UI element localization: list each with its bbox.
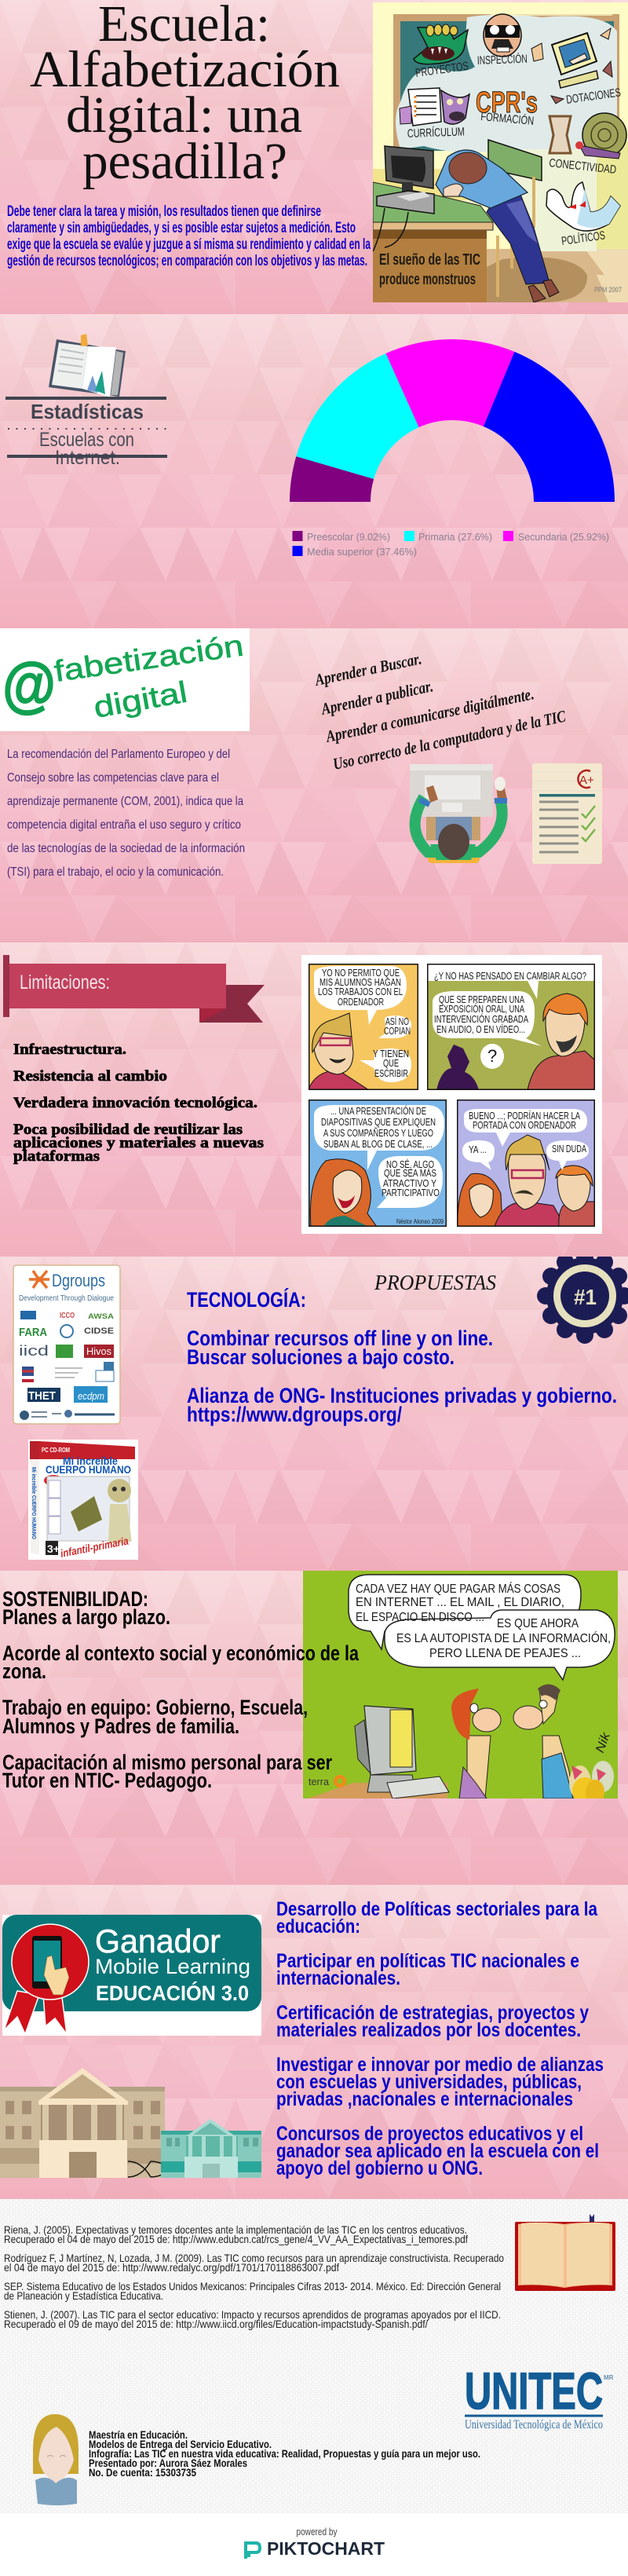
comic strip bbox=[301, 955, 602, 1234]
logo sheet: dgroups: iicd bbox=[19, 1343, 49, 1359]
intro paragraph: gestión de recursos tecnológicos; en comparación con los objetivos y las metas. bbox=[7, 253, 367, 269]
text: aprender a bbox=[312, 649, 568, 774]
text: sostenibilidad: SOSTENIBILIDAD: bbox=[2, 1587, 148, 1611]
panel: estadísticas heading: Escuelas con bbox=[39, 429, 134, 451]
intro paragraph: exige que la escuela se evalúe y juzgue a sí misma su rendimiento y calidad en la bbox=[7, 236, 371, 253]
text: tecnología: https://www.dgroups.org/ bbox=[187, 1403, 402, 1426]
comic panel 3 text: Néstor Alonso 2009 bbox=[396, 1218, 444, 1225]
comic panel 4 text: PORTADA CON ORDENADOR bbox=[473, 1120, 576, 1131]
comic panel 2 text: QUE SE PREPAREN UNA bbox=[439, 994, 524, 1005]
text: references: de Planeación y Estadística Educativa. bbox=[4, 2289, 163, 2302]
comic panel 1 text: ORDENADOR bbox=[338, 997, 384, 1008]
comic panel 3 text bbox=[321, 1105, 444, 1225]
intro paragraph: claramente y sin ambigüedades, y si es posible estar sujetos a medición. Esto bbox=[7, 220, 356, 236]
intro paragraph bbox=[7, 203, 371, 269]
icon: woman avatar bbox=[33, 2414, 78, 2505]
logo sheet: dgroups bbox=[13, 1265, 120, 1424]
text: references: SEP. Sistema Educativo de los Estados Unidos Mexicanos: Principales Cifras 2013- 2014. México. Ed: Dirección General bbox=[4, 2280, 501, 2292]
badge: #1: #1 bbox=[574, 1285, 597, 1309]
text: políticas sectoriales bbox=[276, 1898, 604, 2179]
logo sheet: dgroups: ecdpm bbox=[78, 1390, 104, 1402]
panel: estadísticas heading: Estadísticas bbox=[31, 400, 144, 423]
list: limitaciones: plataformas bbox=[13, 1148, 100, 1165]
caption: El sueño de las TIC bbox=[379, 251, 480, 269]
board labels: INSPECCIÓN bbox=[477, 53, 528, 68]
logo sheet: dgroups: ICCO bbox=[60, 1312, 75, 1320]
chart legend: Media superior (37.46%) bbox=[307, 546, 417, 558]
list: limitaciones: Verdadera innovación tecnológica. bbox=[13, 1095, 257, 1111]
text: sostenibilidad: Capacitación al mismo personal para ser bbox=[2, 1751, 332, 1774]
text: sostenibilidad: Tutor en NTIC- Pedagogo. bbox=[2, 1769, 212, 1792]
chicks and eggs bbox=[569, 1761, 614, 1805]
icon: person at laptop bbox=[410, 764, 507, 863]
footer: powered by piktochart bbox=[246, 2526, 385, 2559]
board labels bbox=[407, 53, 622, 248]
text: competencia digital: competencia digital entraña el uso seguro y crítico bbox=[7, 818, 241, 832]
banner: limitaciones: Limitaciones: bbox=[20, 971, 110, 993]
chair bbox=[488, 140, 542, 181]
title bbox=[30, 0, 340, 190]
list: limitaciones: aplicaciones y materiales a nuevas bbox=[13, 1135, 264, 1151]
text: author credits: Modelos de Entrega del Servicio Educativo. bbox=[89, 2438, 272, 2450]
text: author credits: No. De cuenta: 15303735 bbox=[89, 2466, 196, 2479]
comic panel 2 text: EXPOSICIÓN ORAL, UNA bbox=[439, 1003, 524, 1015]
comic panel 1 bbox=[309, 964, 418, 1090]
monster: CPRs: CPR's bbox=[476, 86, 538, 119]
board labels: POLÍTICOS bbox=[560, 229, 606, 248]
text: sostenibilidad: Alumnos y Padres de familia. bbox=[2, 1714, 239, 1738]
speech bubbles bbox=[349, 1575, 615, 1680]
text: author credits: Maestría en Educación. bbox=[89, 2428, 188, 2441]
logo sheet: dgroups: CIDSE bbox=[84, 1326, 114, 1336]
comic panel 4 text: YA ... bbox=[469, 1144, 487, 1155]
text: author credits: Presentado por: Aurora Sáez Morales bbox=[89, 2457, 247, 2469]
title: digital: una bbox=[66, 86, 302, 144]
logo: alfabetización digital bbox=[0, 628, 250, 731]
board labels: FORMACIÓN bbox=[480, 110, 535, 128]
text: tecnología: Buscar soluciones a bajo costo. bbox=[187, 1345, 455, 1369]
banner: limitaciones bbox=[3, 955, 265, 1023]
text: competencia digital: de las tecnologías de la sociedad de la información bbox=[7, 842, 245, 855]
chart legend: Secundaria (25.92%) bbox=[518, 531, 609, 543]
ghost bbox=[546, 182, 620, 231]
bubble text: CADA VEZ HAY QUE PAGAR MÁS COSAS bbox=[356, 1581, 560, 1596]
award: ganador mobile learning: EDUCACIÓN 3.0 bbox=[96, 1981, 249, 2005]
product box: mi increíble cuerpo humano: CUERPO HUMANO bbox=[46, 1463, 131, 1476]
comic panel 1 text: Y TIENEN bbox=[373, 1048, 409, 1059]
cartoon: el sueño de las TIC produce monstruos bbox=[373, 0, 628, 302]
logo sheet: dgroups: THET bbox=[28, 1389, 56, 1403]
logo sheet: dgroups: Dgroups bbox=[52, 1271, 105, 1290]
text: references bbox=[4, 2223, 504, 2330]
product box: mi increíble cuerpo humano: Mi increíble bbox=[63, 1454, 118, 1467]
comic panel 1 text: ASÍ NO bbox=[385, 1015, 409, 1027]
comic panel 1 text: ESCRIBIR bbox=[374, 1068, 408, 1079]
text: aprender a: Aprender a Buscar. bbox=[312, 649, 423, 690]
chart legend: Preescolar (9.02%) bbox=[307, 531, 390, 543]
chart: semi donut escuelas con internet bbox=[290, 339, 615, 502]
text: sostenibilidad bbox=[2, 1587, 360, 1792]
text: políticas sectoriales: apoyo del gobierno u ONG. bbox=[276, 2157, 483, 2179]
monster: currículum bbox=[400, 88, 469, 126]
title: Alfabetización bbox=[30, 41, 340, 98]
caption: PPM 2007 bbox=[594, 286, 622, 294]
text: tecnología: TECNOLOGÍA: bbox=[187, 1287, 306, 1312]
person left bbox=[451, 1689, 501, 1798]
comic panel 4 bbox=[457, 1100, 595, 1227]
text: competencia digital bbox=[7, 748, 245, 879]
signature and logo: Nik bbox=[593, 1730, 613, 1755]
comic panel 3 text: A SUS COMPAÑEROS Y LUEGO bbox=[323, 1128, 433, 1139]
text: references: el 04 de mayo del 2015 de: http://www.redalyc.org/pdf/1701/170118863007.pdf bbox=[4, 2261, 339, 2274]
list: limitaciones: Infraestructura. bbox=[13, 1041, 126, 1058]
list: limitaciones: Resistencia al cambio bbox=[13, 1068, 167, 1085]
footer: powered by piktochart: powered by bbox=[297, 2526, 338, 2538]
monster: inspección bbox=[484, 14, 521, 57]
text: aprender a: Aprender a publicar. bbox=[318, 676, 435, 719]
list: limitaciones bbox=[13, 1041, 264, 1165]
text: competencia digital: La recomendación del Parlamento Europeo y del bbox=[7, 748, 230, 761]
comic panel 1 text: COPIAN bbox=[384, 1026, 411, 1037]
signature and logo bbox=[309, 1730, 613, 1787]
award: ganador mobile learning bbox=[2, 1915, 261, 2036]
text: sostenibilidad: zona. bbox=[2, 1659, 46, 1683]
text: políticas sectoriales: internacionales. bbox=[276, 1967, 400, 1989]
comic panel 1 text: QUE bbox=[383, 1058, 399, 1069]
footer: powered by piktochart: PIKTOCHART bbox=[267, 2538, 385, 2559]
logo sheet: dgroups: Development Through Dialogue bbox=[19, 1294, 114, 1303]
icon: university buildings bbox=[0, 2068, 261, 2178]
logo sheet: dgroups: Hivos bbox=[86, 1345, 111, 1357]
comic panel 3 text: SUBAN AL BLOG DE CLASE, ... bbox=[323, 1139, 433, 1150]
icon: graded document bbox=[532, 763, 602, 864]
icon: open book bbox=[515, 2214, 615, 2291]
title: pesadilla? bbox=[82, 133, 287, 190]
bubble text: EL ESPACIO EN DISCO ... bbox=[356, 1611, 484, 1624]
comic panel 2 text bbox=[434, 971, 586, 1066]
comic panel 2 text: INTERVENCIÓN GRABADA bbox=[434, 1013, 528, 1025]
panel: estadísticas heading bbox=[5, 334, 170, 469]
badge: #1 bbox=[537, 1248, 628, 1344]
comic panel 3 text: ... UNA PRESENTACIÓN DE bbox=[330, 1105, 426, 1117]
comic panel 2 text: ? bbox=[487, 1046, 497, 1066]
comic panel 1 text: YO NO PERMITO QUE bbox=[322, 968, 400, 979]
desk bbox=[373, 182, 493, 222]
logo sheet: dgroups: FARA bbox=[19, 1326, 47, 1339]
product box: mi increíble cuerpo humano: 3+ bbox=[47, 1542, 60, 1555]
text: references: Stienen, J. (2007). Las TIC para el sector educativo: Impacto y recursos aprendidos de programas apoyados por el IICD. bbox=[4, 2308, 501, 2321]
monster: conectividad bbox=[550, 113, 626, 159]
comic panel 1 text: MIS ALUMNOS HAGAN bbox=[319, 977, 401, 988]
board labels: PROYECTOS bbox=[414, 60, 469, 80]
logo: unitec: MR bbox=[604, 2374, 614, 2381]
text: sostenibilidad: Acorde al contexto social y económico de la bbox=[2, 1641, 360, 1665]
caption bbox=[379, 251, 622, 294]
award: ganador mobile learning: Mobile Learning bbox=[95, 1955, 250, 1978]
comic panel 4 text: SIN DUDA bbox=[552, 1143, 586, 1154]
comic panel 1 text bbox=[318, 968, 411, 1079]
board labels: CURRÍCULUM bbox=[407, 125, 465, 141]
bubble text bbox=[356, 1581, 611, 1660]
comic panel 3 text: PARTICIPATIVO bbox=[382, 1187, 440, 1198]
text: sostenibilidad: Trabajo en equipo: Gobierno, Escuela, bbox=[2, 1696, 308, 1719]
text: references: Riena, J. (2005). Expectativas y temores docentes ante la implementación de las TIC en los centros educativos. bbox=[4, 2223, 467, 2236]
comic panel 3 text: DIAPOSITIVAS QUE EXPLIQUEN bbox=[321, 1117, 436, 1128]
text: tecnología bbox=[187, 1287, 617, 1426]
comic panel 1 text: LOS TRABAJOS CON EL bbox=[318, 986, 403, 997]
text: references: Recuperado el 09 de mayo del 2015 de: http://www.iicd.org/files/Education-impactstudy-Spanish.pdf/ bbox=[4, 2318, 428, 2330]
text: author credits: Infografía: Las TIC en nuestra vida educativa: Realidad, Propuestas y guía para un mejor uso. bbox=[89, 2447, 480, 2460]
monster: dotaciones bbox=[531, 28, 612, 104]
logo: alfabetización digital: @ bbox=[2, 649, 56, 719]
product box: mi increíble cuerpo humano bbox=[28, 1440, 138, 1560]
product box: mi increíble cuerpo humano: infantil-primaria bbox=[60, 1534, 130, 1560]
comic panel 3 text: ATRACTIVO Y bbox=[383, 1178, 437, 1189]
comic panel 4 text bbox=[469, 1110, 586, 1155]
sleeping person bbox=[436, 150, 559, 302]
bubble text: EN INTERNET ... EL MAIL , EL DIARIO, bbox=[356, 1596, 564, 1609]
panel: estadísticas heading: Internet. bbox=[55, 447, 120, 469]
product box: mi increíble cuerpo humano: Mi increíble CUERPO HUMANO bbox=[31, 1467, 36, 1539]
intro paragraph: Debe tener clara la tarea y misión, los resultados tienen que definirse bbox=[7, 203, 321, 220]
text: competencia digital: (TSI) para el trabajo, el ocio y la comunicación. bbox=[7, 865, 224, 879]
comic panel 3 text: NO SÉ, ALGO bbox=[386, 1158, 434, 1170]
comic panel 2 bbox=[427, 964, 595, 1090]
comic panel 2 text: EN AUDIO, O EN VÍDEO... bbox=[436, 1023, 525, 1035]
monster: proyectos bbox=[414, 24, 468, 64]
text: references: Recuperado el 04 de mayo del 2015 de: http://www.edubcn.cat/rcs_gene/4_VV_AA_Expectativas_i_temores.pdf bbox=[4, 2233, 468, 2245]
person right bbox=[513, 1684, 573, 1798]
heading: propuestas: PROPUESTAS bbox=[374, 1271, 496, 1294]
bubble text: ES QUE AHORA bbox=[497, 1617, 579, 1630]
text: políticas sectoriales: privadas ,nacionales e internacionales bbox=[276, 2088, 573, 2110]
caption: produce monstruos bbox=[379, 271, 476, 288]
cartoon: autopista de la información bbox=[303, 1571, 618, 1805]
signature and logo: terra bbox=[309, 1776, 330, 1787]
bubble text: PERO LLENA DE PEAJES ... bbox=[429, 1647, 581, 1660]
text: aprender a: Uso correcto de la computadora y de la TIC bbox=[331, 706, 568, 774]
text: competencia digital: Consejo sobre las competencias clave para el bbox=[7, 771, 219, 785]
text: sostenibilidad: Planes a largo plazo. bbox=[2, 1605, 170, 1629]
icon: graded document: A+ bbox=[579, 774, 594, 787]
text: references: Rodríguez F, J Martínez, N, Lozada, J M. (2009). Las TIC como recursos para un aprendizaje constructivista. Recuperado bbox=[4, 2252, 504, 2264]
computer bbox=[373, 146, 434, 251]
chart legend: Primaria (27.6%) bbox=[418, 531, 492, 543]
monitor bbox=[308, 1706, 449, 1798]
icon: book with chart bbox=[49, 334, 126, 397]
award: ganador mobile learning: Ganador bbox=[95, 1923, 221, 1959]
logo: alfabetización digital: digital bbox=[91, 676, 190, 725]
logo sheet: dgroups: AWSA bbox=[88, 1312, 115, 1320]
comic panel 3 bbox=[309, 1100, 447, 1227]
product box: mi increíble cuerpo humano: PC CD-ROM bbox=[42, 1447, 70, 1454]
logo: alfabetización digital: fabetización bbox=[52, 630, 246, 689]
comic panel 4 text: BUENO ...; PODRÍAN HACER LA bbox=[469, 1110, 580, 1122]
text: aprender a: Aprender a comunicarse digitálmente. bbox=[323, 684, 535, 746]
text: author credits bbox=[89, 2428, 480, 2479]
chart legend bbox=[292, 531, 609, 558]
text: tecnología: Combinar recursos off line y on line. bbox=[187, 1326, 493, 1350]
text: políticas sectoriales: educación: bbox=[276, 1916, 360, 1937]
comic panel 3 text: QUE SEA MÁS bbox=[384, 1167, 436, 1179]
text: competencia digital: aprendizaje permanente (COM, 2001), indica que la bbox=[7, 795, 243, 808]
list: limitaciones: Poca posibilidad de reutilizar las bbox=[13, 1122, 243, 1138]
